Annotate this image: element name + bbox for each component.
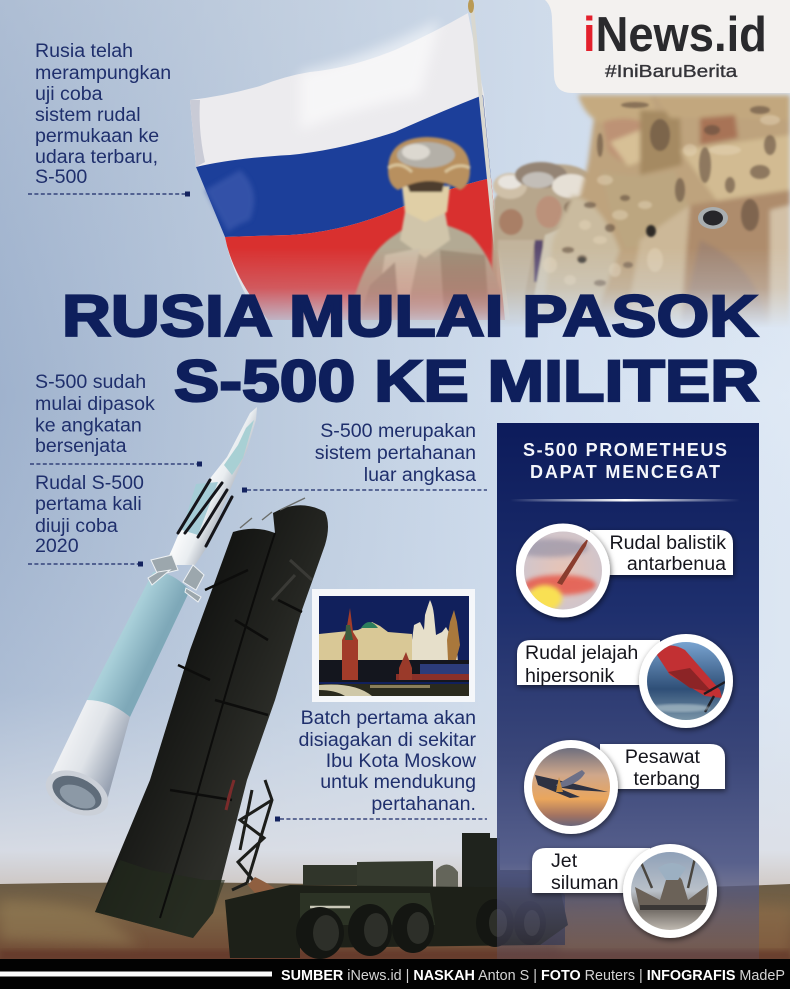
panel heading (523, 440, 727, 482)
callout: Batch pertama (275, 707, 487, 822)
callout: pertahanan luar angkasa: luar angkasa (364, 464, 476, 486)
missile nozzle (39, 761, 115, 825)
target: Jet siluman (532, 844, 717, 938)
missile fins (148, 555, 204, 602)
callout: uji coba: sistem rudal (35, 104, 141, 126)
callout: diuji coba (28, 472, 144, 566)
soldier: centre (354, 136, 500, 324)
flag pole (468, 0, 498, 250)
callout: diuji coba: Rudal S-500 (35, 472, 144, 494)
logo tagline: #IniBaruBerita (605, 61, 737, 82)
credits: SUMBER iNews.id | NASKAH Anton S | FOTO Reuters | INFOGRAFIS MadeP (281, 968, 785, 984)
callout: dipasok: mulai dipasok (35, 393, 155, 415)
title: RUSIA MULAI PASOK (62, 284, 758, 349)
callout: diuji coba: pertama kali (35, 493, 142, 515)
callout: uji coba: uji coba (35, 83, 103, 105)
photo: soldiers (347, 95, 790, 340)
target: Rudal jelajah (517, 634, 733, 728)
target: Rudal balistik: antarbenua (627, 553, 726, 575)
wheels (296, 899, 546, 959)
title (62, 284, 759, 414)
target: Jet siluman: siluman (551, 872, 619, 894)
callout: Batch pertama: Batch pertama akan (301, 707, 476, 729)
panel: S-500 Prometheus targets (497, 423, 759, 959)
target: Pesawat terbang (524, 740, 725, 834)
callout: pertahanan luar angkasa (242, 420, 487, 492)
panel heading: DAPAT MENCEGAT (530, 462, 720, 482)
launcher truck (225, 833, 568, 959)
target: Pesawat terbang: Pesawat (625, 746, 701, 768)
callout: Batch pertama: untuk mendukung (320, 771, 476, 793)
target: Rudal balistik: Rudal balistik (609, 532, 726, 554)
ground field (0, 882, 790, 960)
callout: uji coba: udara terbaru, (35, 146, 158, 168)
soldier: right front (540, 95, 790, 330)
callout: uji coba (28, 40, 190, 196)
logo wordmark: iNews.id (583, 7, 767, 62)
target: Pesawat terbang: terbang (634, 768, 700, 790)
callout: uji coba: permukaan ke (35, 125, 159, 147)
target: Jet siluman: Jet (551, 850, 578, 872)
soldier group: background (490, 160, 588, 324)
callout: uji coba: Rusia telah (35, 40, 133, 62)
callout: pertahanan luar angkasa: sistem pertahanan (315, 442, 476, 464)
callout: pertahanan luar angkasa: S-500 merupakan (320, 420, 476, 442)
logo panel (545, 0, 790, 93)
launcher tubes (95, 498, 328, 938)
callout: dipasok: S-500 sudah (35, 371, 146, 393)
soldier: gun muzzle (698, 207, 728, 229)
callout: dipasok: bersenjata (35, 435, 127, 457)
photo: Kremlin (312, 589, 475, 702)
callout: diuji coba: 2020 (35, 535, 79, 557)
target: Rudal jelajah: Rudal jelajah (525, 642, 638, 664)
target: Rudal jelajah: hipersonik (525, 665, 615, 687)
target: Rudal balistik (512, 524, 733, 618)
callout: dipasok: ke angkatan (35, 414, 142, 436)
callout: uji coba: S-500 (35, 166, 87, 188)
callout: dipasok (30, 371, 202, 466)
callout: diuji coba: diuji coba (35, 515, 118, 537)
callout: Batch pertama: pertahanan. (371, 793, 476, 815)
callout: uji coba: merampungkan (35, 62, 171, 84)
panel heading: S-500 PROMETHEUS (523, 440, 727, 460)
lattice mast (232, 780, 272, 890)
footer bar (0, 959, 790, 989)
soldier: camo flecks (543, 102, 780, 286)
missile (39, 407, 257, 825)
callout: Batch pertama: disiagakan di sekitar (298, 729, 476, 751)
photo: Russian flag (190, 13, 510, 320)
callout: Batch pertama: Ibu Kota Moskow (326, 750, 477, 772)
title: S-500 KE MILITER (174, 350, 759, 414)
